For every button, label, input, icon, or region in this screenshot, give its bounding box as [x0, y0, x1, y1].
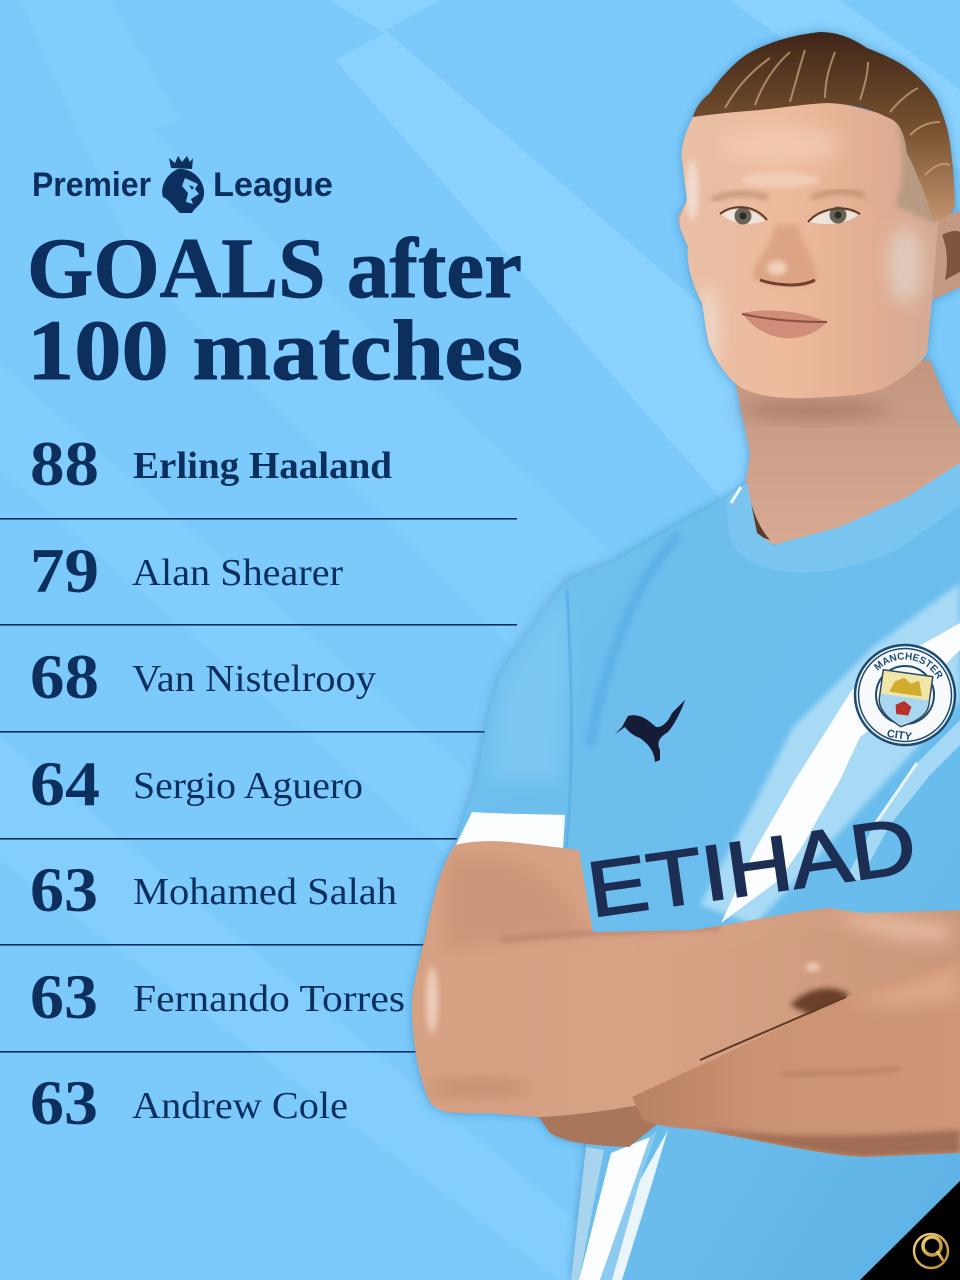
hair streaks: [725, 50, 950, 175]
row: Fernando Torres 63: 63: [30, 961, 98, 1032]
face: [680, 100, 940, 398]
head: [678, 32, 960, 398]
corner badge: [860, 1181, 960, 1280]
crossing forearm: [632, 960, 960, 1157]
left ear: [678, 200, 688, 247]
title: [27, 220, 523, 398]
shirt: [452, 463, 960, 1280]
ranking table: [0, 428, 517, 1138]
player illustration: [406, 26, 960, 1280]
row: Andrew Cole 63: Andrew Cole: [132, 1085, 348, 1127]
nose: [752, 225, 817, 286]
face shading: [686, 120, 937, 375]
row: Sergio Aguero 64: 64: [30, 748, 100, 819]
title: GOALS after: [27, 220, 522, 316]
hair: [693, 32, 955, 222]
logo: Premier League: Premier: [32, 166, 151, 204]
row: Fernando Torres 63: Fernando Torres: [133, 978, 405, 1020]
icon: gold ring logo: [914, 1234, 948, 1268]
logo: Premier League: [32, 156, 333, 213]
eyes: [720, 206, 860, 224]
hand under elbow: [539, 1095, 660, 1147]
row: Alan Shearer 79: [30, 535, 343, 606]
neck: [735, 360, 960, 545]
crest: Manchester City: [854, 644, 956, 746]
row: Erling Haaland 88: 88: [30, 428, 99, 499]
row: Mohamed Salah 63: [30, 854, 397, 925]
row: Van Nistelrooy 68: [30, 641, 376, 712]
row: Alan Shearer 79: 79: [30, 535, 99, 606]
crest: Manchester City: MANCHESTER: [874, 652, 942, 680]
crest: Manchester City: CITY: [886, 728, 913, 743]
row: Alan Shearer 79: Alan Shearer: [132, 552, 343, 594]
arms: [412, 841, 960, 1157]
row: Mohamed Salah 63: Mohamed Salah: [133, 871, 397, 913]
logo: Premier League: League: [213, 166, 333, 204]
row: Andrew Cole 63: [30, 1067, 348, 1138]
row: Van Nistelrooy 68: 68: [30, 641, 99, 712]
sleeve highlight and folds: [490, 535, 680, 850]
row: Mohamed Salah 63: 63: [30, 854, 98, 925]
row: Fernando Torres 63: [30, 961, 405, 1032]
eyebrows: [712, 192, 865, 200]
title: 100 matches: [27, 302, 523, 398]
collar: [727, 463, 960, 573]
row: Van Nistelrooy 68: Van Nistelrooy: [132, 658, 376, 700]
row: Sergio Aguero 64: [30, 748, 363, 819]
row: Erling Haaland 88: [30, 428, 392, 499]
icon: lion crest: [162, 156, 204, 213]
mouth: [742, 310, 827, 338]
arm shading: [426, 857, 950, 1096]
sponsor: ETIHAD: ETIHAD: [582, 801, 921, 934]
chest stripes: [571, 583, 960, 1280]
brand logo: puma: [615, 700, 685, 762]
ear: [923, 212, 960, 300]
row: Sergio Aguero 64: Sergio Aguero: [133, 765, 363, 807]
upper arm and forearm: [412, 841, 960, 1117]
row: Erling Haaland 88: Erling Haaland: [133, 445, 392, 487]
forearm shading: [700, 965, 960, 1157]
row: Andrew Cole 63: 63: [30, 1067, 98, 1138]
sleeve cuff: [455, 812, 565, 848]
